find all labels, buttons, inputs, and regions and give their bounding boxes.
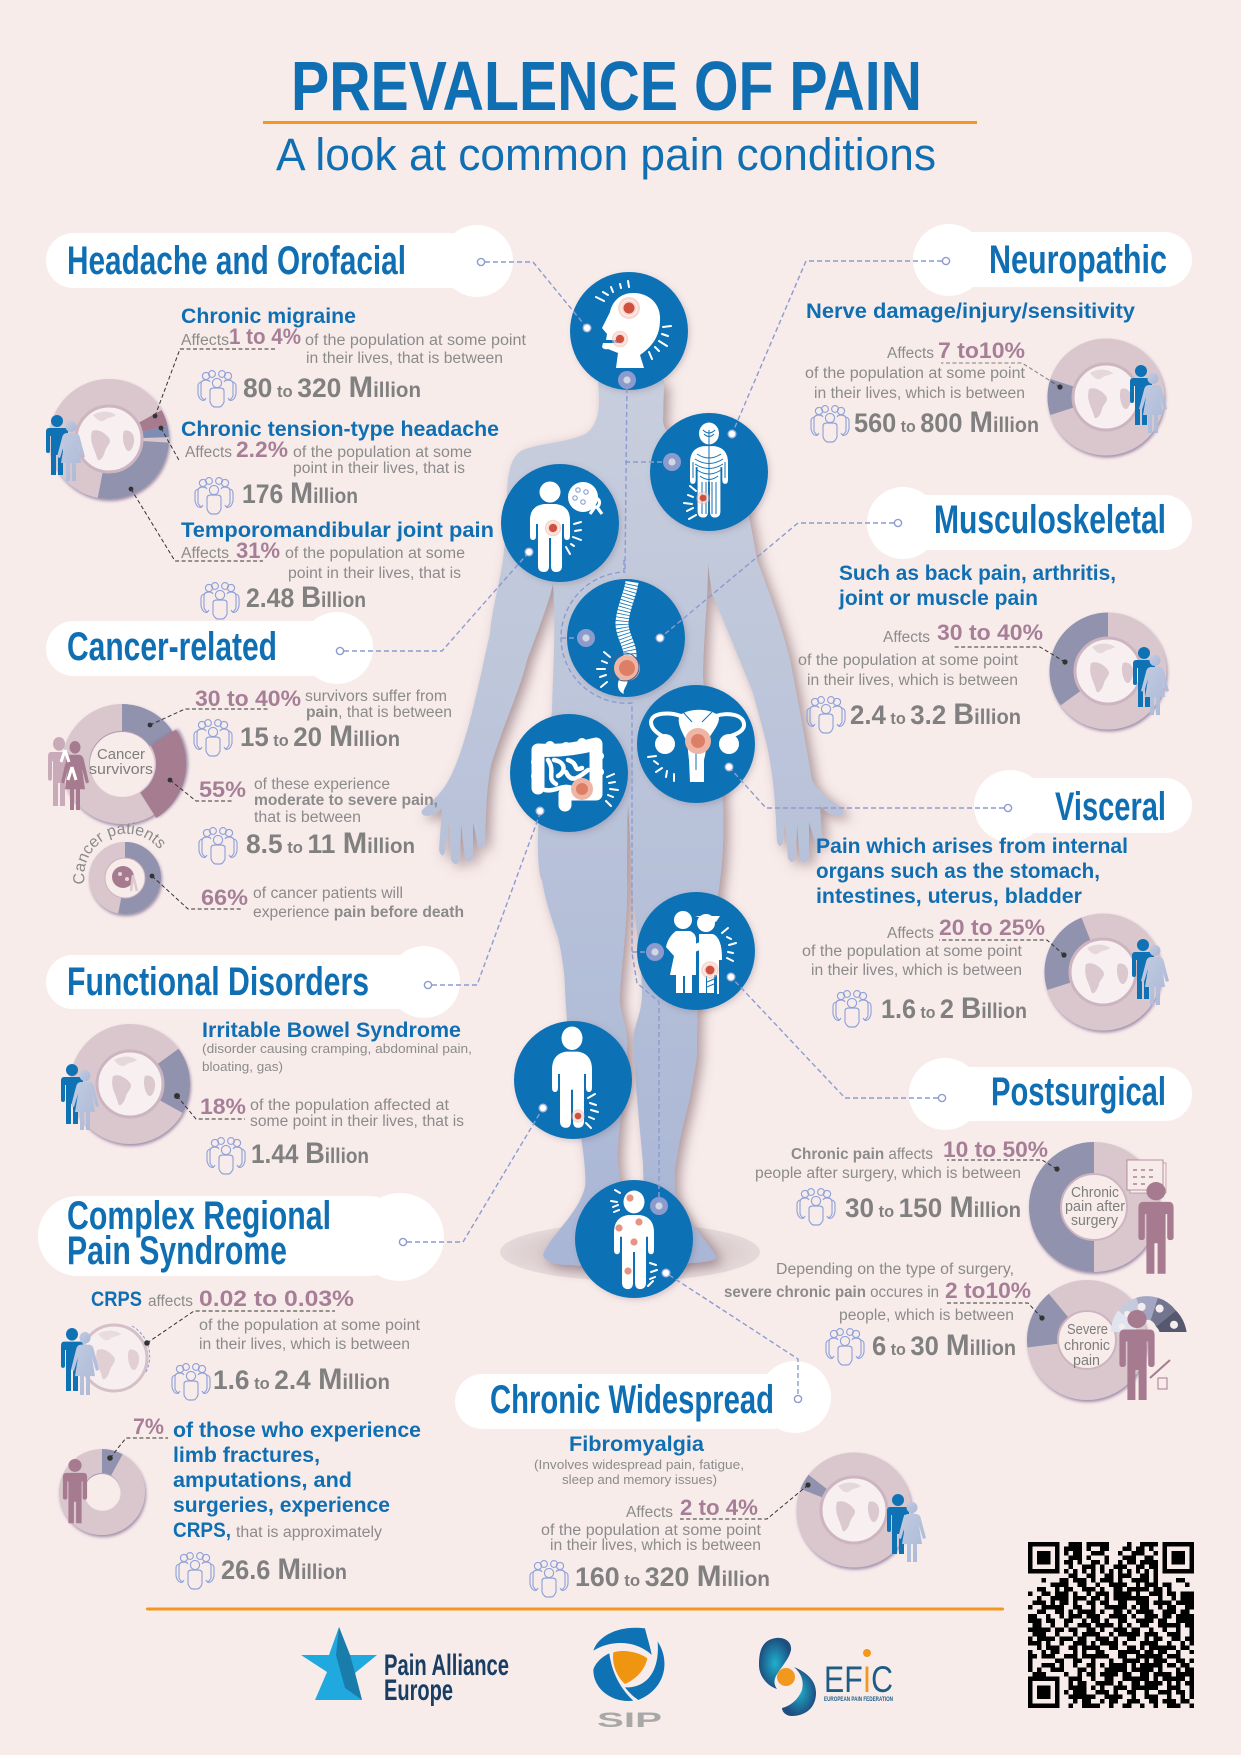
irritable bowel syndrome: 1.44 Billion [251, 1137, 369, 1170]
icon circle: nerves [650, 413, 768, 531]
heading pill: Headache and Orofacial [67, 239, 406, 283]
heading pill [867, 487, 1192, 559]
stat: moderate to severe pain: that is between [254, 809, 361, 826]
people icon [1130, 365, 1167, 433]
irritable bowel syndrome: some point in their lives, that is [250, 1113, 464, 1130]
person with limb injury [63, 1459, 87, 1523]
stat: moderate to severe pain: 55% [199, 777, 246, 802]
temporomandibular joint pain: Temporomandibular joint pain [181, 519, 494, 542]
donut: cancer patients [97, 850, 153, 906]
donut: severe chronic pain: pain [1073, 1353, 1100, 1369]
text [798, 562, 1116, 733]
temporomandibular joint pain: of the population at some [285, 545, 465, 562]
heading pill: Neuropathic [989, 238, 1167, 282]
text: Pain which arises from internal [816, 835, 1128, 858]
panel: cancer-related [46, 612, 464, 921]
text: in their lives, which is between [550, 1537, 761, 1554]
stat: moderate to severe pain: of these experience [254, 776, 390, 793]
donut: cancer survivors [73, 715, 171, 813]
heading pill [913, 224, 1192, 296]
logo: pain alliance europe: Pain Alliance [384, 1649, 509, 1682]
heading pill: Visceral [1055, 785, 1166, 829]
icon circle: postsurgical [637, 892, 755, 1010]
donut chart [810, 1466, 898, 1554]
chronic tension-type headache [181, 418, 499, 514]
stat: survivors: 15 to 20 Million [240, 720, 400, 753]
logo: efic [759, 1638, 893, 1716]
donut: cancer survivors: Cancer [97, 747, 145, 763]
text: 160 to 320 Million [575, 1560, 770, 1593]
logo: pain alliance europe: Europe [384, 1674, 453, 1707]
icon: survivors with ribbons [48, 737, 89, 810]
text: joint or muscle pain [838, 587, 1038, 610]
panel: neuropathic [805, 224, 1192, 442]
crps limb fractures: 7% [133, 1414, 164, 1439]
irritable bowel syndrome: (disorder causing cramping, abdominal pain, [202, 1041, 472, 1056]
donut: severe chronic pain: chronic [1064, 1338, 1110, 1354]
text: of the population at some point [802, 943, 1023, 960]
people icon [1132, 939, 1169, 1005]
donut: chronic pain after surgery: Chronic [1071, 1185, 1119, 1201]
donut chart [62, 392, 156, 486]
stat: chronic pain after surgery: 30 to 150 Million [845, 1191, 1021, 1224]
stat: survivors: survivors suffer from [305, 688, 447, 705]
irritable bowel syndrome: of the population affected at [250, 1097, 450, 1114]
icon circle: leg pain [514, 1021, 632, 1139]
crps limb fractures: CRPS, [173, 1519, 231, 1542]
text: Affects [887, 925, 934, 942]
chronic migraine: 1 to 4% [229, 324, 301, 349]
heading pill: Cancer-related [67, 625, 277, 669]
stat: pain before death [201, 885, 464, 921]
qr code [1028, 1544, 1194, 1706]
crps prevalence: 1.6 to 2.4 Million [213, 1363, 390, 1396]
logo: sip: SIP [597, 1709, 662, 1732]
chronic migraine: of the population at some point [305, 332, 527, 349]
stat: pain before death: of cancer patients will [253, 885, 403, 902]
stat: severe chronic pain: people, which is between [839, 1307, 1014, 1324]
irritable bowel syndrome: Irritable Bowel Syndrome [202, 1019, 461, 1042]
chronic migraine: 80 to 320 Million [243, 371, 421, 404]
temporomandibular joint pain: 31% [236, 538, 280, 563]
panel: chronic widespread [455, 1361, 926, 1597]
panel: functional disorders [46, 946, 472, 1174]
text: 30 to 40% [937, 620, 1043, 645]
stat: chronic pain after surgery: people after surgery, which is between [755, 1165, 1021, 1182]
crps limb fractures: amputations, and [173, 1469, 352, 1492]
icon: pain scale fan [1111, 1296, 1187, 1332]
crps prevalence: in their lives, which is between [199, 1336, 410, 1353]
stat: severe chronic pain: severe chronic pain occures in [724, 1284, 939, 1301]
subtitle: A look at common pain conditions [276, 129, 936, 180]
text: 2 to 4% [680, 1495, 758, 1520]
text: Such as back pain, arthritis, [839, 562, 1116, 585]
stat: moderate to severe pain: moderate to severe pain, [254, 792, 438, 809]
icon circle: uterus [637, 685, 755, 803]
icon: person [1138, 1182, 1174, 1274]
crps limb fractures: 26.6 Million [221, 1553, 347, 1586]
donut: chronic pain after surgery [1045, 1158, 1143, 1256]
heading pill [455, 1361, 831, 1433]
stat: severe chronic pain [724, 1261, 1031, 1365]
heading pill [974, 770, 1192, 842]
crps limb fractures: surgeries, experience [173, 1494, 390, 1517]
heading pill [38, 1193, 444, 1281]
leader line [954, 647, 1068, 665]
curved label: cancer patients: Cancer patients [73, 822, 164, 884]
icon circle: bowel [510, 714, 628, 832]
stat: severe chronic pain: Depending on the type of surgery, [776, 1261, 1014, 1278]
stat: chronic pain after surgery [755, 1137, 1048, 1225]
panel: headache and orofacial [46, 225, 527, 619]
heading pill: Pain Syndrome [67, 1229, 287, 1273]
temporomandibular joint pain [181, 519, 494, 619]
text: in their lives, which is between [814, 385, 1025, 402]
text: 1.6 to 2 Billion [881, 992, 1027, 1025]
heading pill: Chronic Widespread [490, 1378, 774, 1422]
globe with people [61, 1325, 150, 1395]
chronic tension-type headache: 176 Million [242, 477, 358, 510]
donut chart [1061, 352, 1151, 442]
text: intestines, uterus, bladder [816, 885, 1082, 908]
text: (Involves widespread pain, fatigue, [534, 1457, 744, 1472]
text [802, 835, 1128, 1027]
donut chart [1058, 927, 1148, 1017]
temporomandibular joint pain: 2.48 Billion [246, 581, 366, 614]
donut chart [84, 1038, 176, 1130]
temporomandibular joint pain: point in their lives, that is [288, 565, 461, 582]
logo: efic: EUROPEAN PAIN FEDERATION [824, 1696, 893, 1703]
text: of the population at some point [541, 1522, 762, 1539]
icon circle: spine [567, 579, 685, 697]
logo: sip [593, 1628, 664, 1732]
panel: postsurgical [724, 1058, 1192, 1400]
stat: moderate to severe pain: 8.5 to 11 Million [246, 827, 415, 860]
text: organs such as the stomach, [816, 860, 1100, 883]
irritable bowel syndrome [200, 1019, 472, 1174]
text: in their lives, which is between [811, 962, 1022, 979]
icon circle: widespread [575, 1180, 693, 1298]
text: Affects [626, 1504, 673, 1521]
connector lines [344, 261, 1004, 1394]
heading pill [46, 946, 460, 1018]
text: Affects [883, 629, 930, 646]
stat: pain before death: 66% [201, 885, 248, 910]
chronic tension-type headache: of the population at some [293, 444, 472, 461]
chronic migraine [181, 305, 527, 407]
text: 7 to10% [938, 338, 1025, 363]
leader lines [107, 1311, 335, 1461]
crps prevalence: CRPS [91, 1288, 142, 1311]
stat: moderate to severe pain [199, 776, 438, 864]
heading pill: Complex Regional [67, 1194, 331, 1238]
donut chart [1063, 626, 1153, 716]
panel: visceral [802, 770, 1192, 1027]
icon circle: head [570, 272, 688, 390]
icon: person with syringe [1119, 1310, 1170, 1400]
chronic tension-type headache: point in their lives, that is [293, 460, 465, 477]
heading pill: Functional Disorders [67, 960, 369, 1004]
crps prevalence [91, 1286, 421, 1400]
stat: survivors: pain, that is between [306, 704, 452, 721]
logo: efic: EFIC [824, 1659, 893, 1700]
text: in their lives, which is between [807, 672, 1018, 689]
donut: severe chronic pain: Severe [1067, 1322, 1108, 1338]
logo: pain alliance europe [301, 1627, 509, 1707]
crps limb fractures: that is approximately [236, 1524, 382, 1541]
text: of the population at some point [798, 652, 1019, 669]
text: Nerve damage/injury/sensitivity [806, 300, 1135, 323]
chronic tension-type headache: Affects [185, 444, 232, 461]
heading pill [46, 225, 513, 297]
leader line [174, 1093, 245, 1119]
chronic migraine: Chronic migraine [181, 305, 356, 328]
crps prevalence: of the population at some point [199, 1317, 421, 1334]
people icon [61, 1064, 99, 1130]
text [530, 1433, 770, 1597]
panel: complex regional pain syndrome [38, 1193, 444, 1589]
chronic migraine: Affects [181, 332, 229, 349]
crps prevalence: affects [148, 1293, 193, 1310]
stat: chronic pain after surgery: Chronic pain affects [791, 1146, 933, 1163]
stat: severe chronic pain: 6 to 30 Million [872, 1329, 1016, 1362]
stat: severe chronic pain: 2 to10% [945, 1278, 1031, 1303]
irritable bowel syndrome: 18% [200, 1094, 246, 1119]
people icon [46, 415, 85, 481]
heading pill [46, 612, 373, 684]
leader lines [84, 709, 269, 909]
crps limb fractures: limb fractures, [173, 1444, 320, 1467]
donut: severe chronic pain [1042, 1296, 1132, 1384]
text: sleep and memory issues) [562, 1472, 717, 1487]
chronic tension-type headache: 2.2% [236, 437, 288, 462]
dots on figure [525, 324, 736, 1277]
leader line [939, 940, 1067, 958]
people icon [887, 1494, 926, 1562]
body silhouette [422, 380, 844, 1266]
leader lines [129, 349, 275, 561]
text: 20 to 25% [939, 915, 1045, 940]
temporomandibular joint pain: Affects [181, 545, 229, 562]
heading pill [909, 1058, 1192, 1130]
crps prevalence: 0.02 to 0.03% [199, 1286, 354, 1311]
icon circle: cancer [501, 464, 619, 582]
icon: calendar [1127, 1160, 1166, 1193]
leader lines [947, 1160, 1060, 1321]
text: of the population at some point [805, 365, 1026, 382]
donut: chronic pain after surgery: surgery [1071, 1213, 1119, 1229]
text: 2.4 to 3.2 Billion [850, 698, 1021, 731]
leader line [680, 1482, 811, 1519]
stat: survivors [194, 686, 452, 756]
stat: pain before death: experience pain before death [253, 904, 464, 921]
chronic migraine: in their lives, that is between [306, 350, 503, 367]
irritable bowel syndrome: bloating, gas) [202, 1059, 283, 1074]
stat: chronic pain after surgery: 10 to 50% [943, 1137, 1048, 1162]
title: PREVALENCE OF PAIN [291, 47, 922, 125]
leader line [941, 363, 1063, 390]
donut: 7 percent [71, 1461, 133, 1523]
heading pill: Postsurgical [991, 1070, 1166, 1114]
text: 560 to 800 Million [854, 406, 1039, 439]
text [805, 300, 1135, 442]
donut: cancer survivors: survivors [89, 762, 153, 778]
crps limb fractures: of those who experience [173, 1419, 421, 1442]
heading pill: Musculoskeletal [934, 498, 1166, 542]
crps limb fractures [133, 1414, 421, 1589]
chronic tension-type headache: Chronic tension-type headache [181, 418, 499, 441]
people icon [1133, 647, 1169, 715]
panel: musculoskeletal [798, 487, 1192, 733]
ground shadow [500, 1223, 760, 1281]
footer rule [146, 1608, 1004, 1610]
stat: survivors: 30 to 40% [195, 686, 301, 711]
text: Affects [887, 345, 934, 362]
donut: chronic pain after surgery: pain after [1065, 1199, 1125, 1215]
text: Fibromyalgia [569, 1433, 704, 1456]
